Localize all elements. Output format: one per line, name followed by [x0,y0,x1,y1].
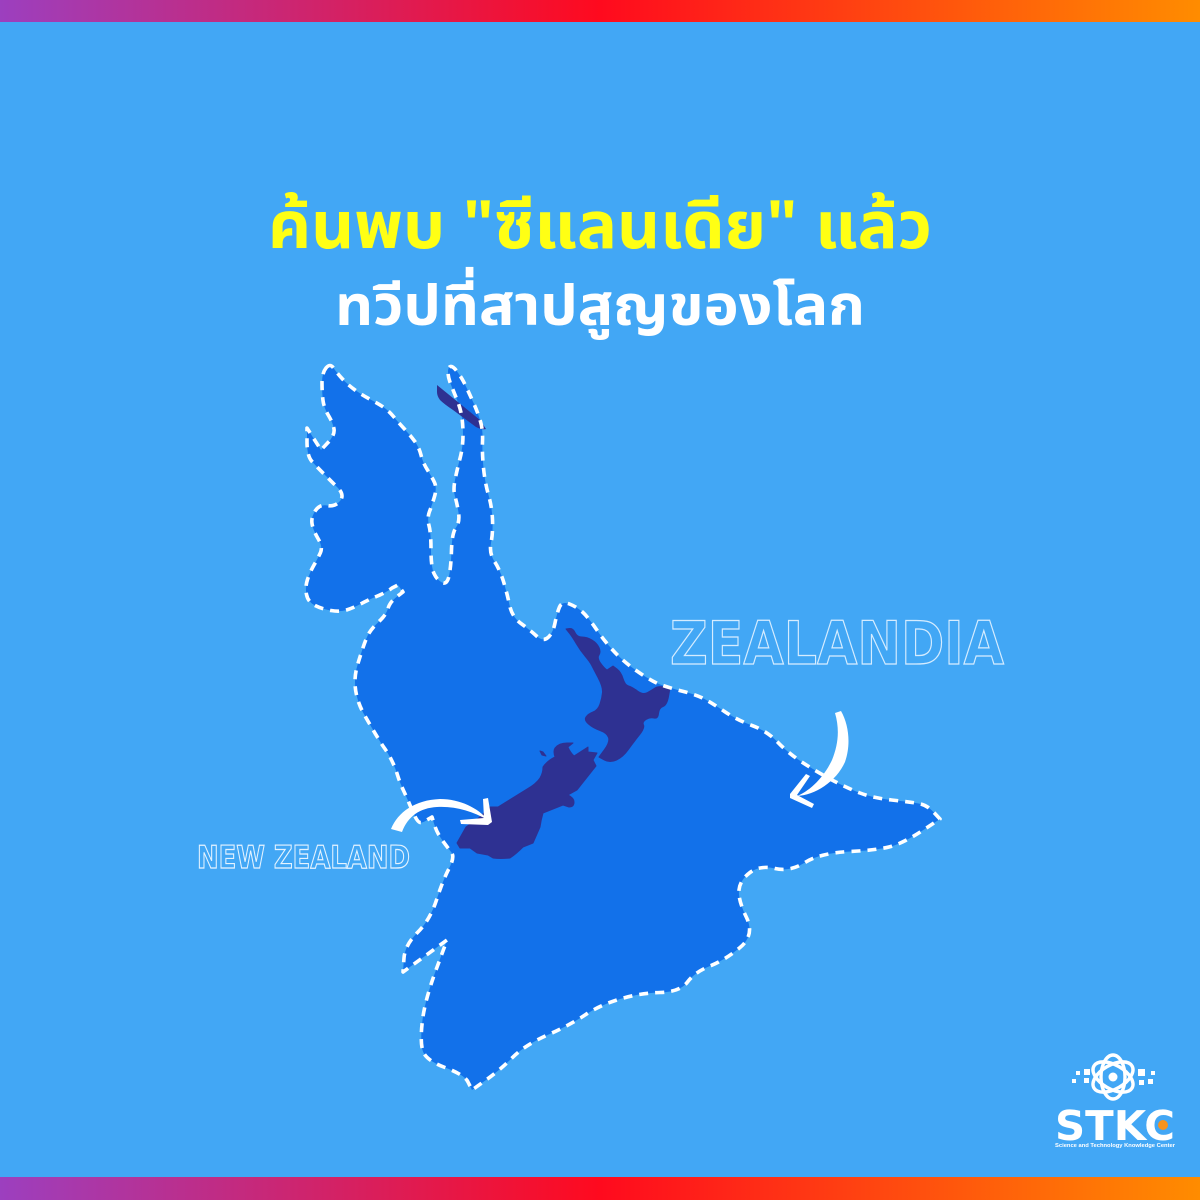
icon: pixel squares [1072,1069,1155,1085]
map: Zealandia [306,366,940,1090]
wordmark: STKC [1055,1102,1175,1150]
New Zealand landmass [457,628,670,858]
icon: atom [1088,1055,1138,1099]
top gradient bar [0,0,1200,22]
dashed continent outline [306,366,940,1090]
arrow to New Zealand [391,798,492,832]
New Caledonia landmass [437,385,486,429]
title: ค้นพบ "ซีแลนเดีย" แล้ว [268,178,932,278]
arrow to Zealandia [790,711,848,808]
STKC logo [1055,1055,1176,1150]
orange dot [1158,1120,1168,1130]
logo tagline: Science and Technology Knowledge Center [1055,1143,1176,1149]
subtitle: ทวีปที่สาปสูญของโลก [335,266,865,351]
label: NEW ZEALAND: NEW ZEALAND [197,840,410,876]
label: ZEALANDIA: ZEALANDIA [670,609,1004,679]
bottom gradient bar [0,1177,1200,1200]
continent fill [306,366,940,1090]
